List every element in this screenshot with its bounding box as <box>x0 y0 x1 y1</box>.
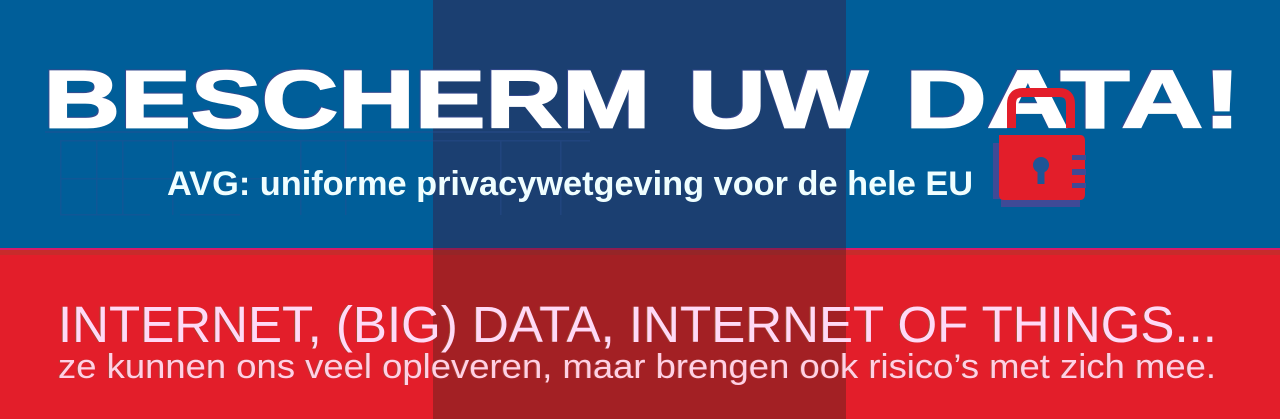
text: risks statement: ze kunnen ons veel opleveren, maar brengen ook risico’s met zich mee. <box>58 348 1216 386</box>
main title: DATA! <box>905 54 1241 146</box>
icon: red padlock <box>993 92 1086 207</box>
main title: UW <box>688 54 869 146</box>
main title: BESCHERM <box>44 54 650 146</box>
panel: red bottom band <box>0 248 1280 419</box>
subtitle: AVG: uniforme privacywetgeving voor de hele EU <box>167 165 973 203</box>
heading: internet, big data: INTERNET, (BIG) DATA, INTERNET OF THINGS... <box>58 296 1217 353</box>
main title <box>44 54 1241 146</box>
panel: blue top band <box>0 0 1280 248</box>
